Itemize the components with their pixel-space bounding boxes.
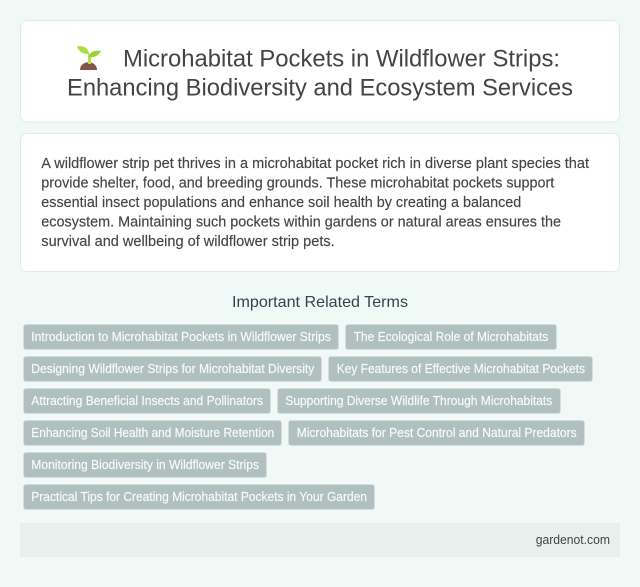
chip: designing strips [24, 356, 322, 382]
title text: Enhancing Biodiversity and Ecosystem Services [67, 74, 573, 102]
chip: attracting insects [24, 388, 270, 414]
chip: key features [328, 356, 592, 382]
chip: designing strips: Designing Wildflower Strips for Microhabitat Diversity [31, 362, 315, 376]
chip: attracting insects: Attracting Beneficial Insects and Pollinators [31, 394, 263, 408]
panel: description card [20, 134, 620, 272]
description text: essential insect populations and enhance soil health by creating a balanced [41, 194, 521, 211]
chip: monitoring: Monitoring Biodiversity in Wildflower Strips [31, 458, 259, 472]
chip: pest control [288, 420, 584, 446]
description text: A wildflower strip pet thrives in a microhabitat pocket rich in diverse plant species that [41, 155, 590, 172]
footer source text: gardenot.com [536, 533, 610, 547]
chip: soil health [24, 420, 282, 446]
description text: ecosystem. Maintaining such pockets within gardens or natural areas ensures the [41, 213, 561, 230]
chip: practical tips [24, 484, 374, 510]
chip: introduction: Introduction to Microhabitat Pockets in Wildflower Strips [31, 330, 331, 344]
chip: supporting wildlife: Supporting Diverse Wildlife Through Microhabitats [285, 394, 552, 408]
icon: seedling [77, 46, 101, 70]
panel: title card [20, 20, 620, 122]
term chips [24, 324, 592, 510]
chip: key features: Key Features of Effective Microhabitat Pockets [337, 362, 585, 376]
chip: soil health: Enhancing Soil Health and Moisture Retention [31, 426, 274, 440]
chip: monitoring [24, 452, 266, 478]
chip: ecological role [346, 324, 556, 350]
title text [67, 46, 573, 102]
heading: important related terms: Important Related Terms [232, 294, 408, 311]
title text: Microhabitat Pockets in Wildflower Strips: [123, 46, 560, 72]
footer bar [20, 523, 620, 557]
description text [41, 155, 590, 250]
description text: survival and wellbeing of wildflower strip pets. [41, 233, 335, 250]
chip: supporting wildlife [278, 388, 560, 414]
chip: ecological role: The Ecological Role of Microhabitats [354, 330, 548, 344]
description text: provide shelter, food, and breeding grounds. These microhabitat pockets support [41, 174, 555, 191]
chip: practical tips: Practical Tips for Creating Microhabitat Pockets in Your Garden [31, 490, 367, 504]
chip: introduction [24, 324, 338, 350]
chip: pest control: Microhabitats for Pest Control and Natural Predators [297, 426, 577, 440]
